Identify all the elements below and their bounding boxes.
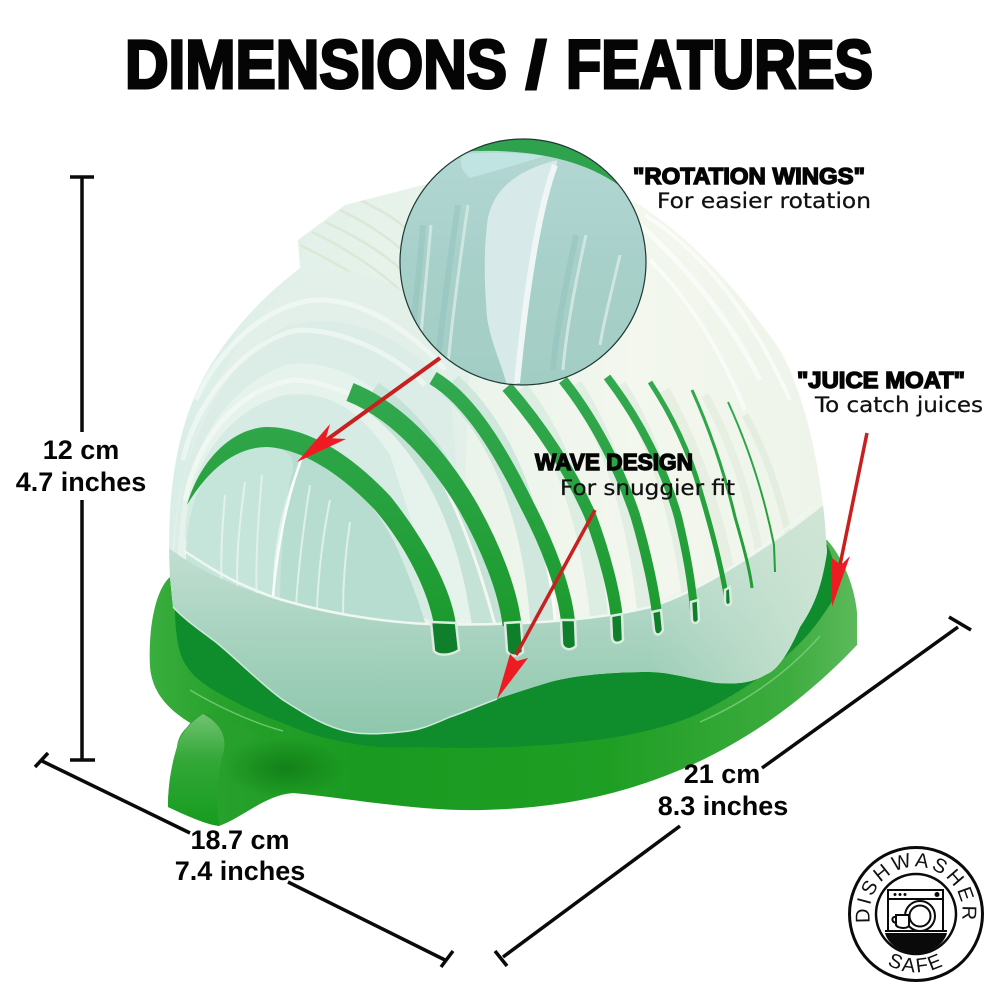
- callout: juice moat: [797, 367, 983, 417]
- callout: wave design: For snuggier fit: [560, 476, 735, 500]
- pale bands between slots: [370, 385, 795, 625]
- green tray with handle: [150, 540, 857, 826]
- badge lettering: DISHWASHER: [856, 852, 976, 922]
- title: /: [526, 28, 546, 102]
- bowl bottom edge: [173, 607, 497, 734]
- title: DIMENSIONS: [125, 26, 507, 103]
- dimension: height: [10, 177, 150, 760]
- panel ribs: [221, 465, 350, 613]
- badge dishwasher icon: [885, 890, 947, 931]
- lower band below rim: [160, 500, 840, 740]
- dimension: height: 12 cm: [43, 435, 119, 465]
- bowl dome: [160, 170, 840, 740]
- dimension: depth: 7.4 inches: [175, 856, 305, 886]
- arrow: wave design: [497, 510, 595, 699]
- left concentric shells: [170, 270, 470, 620]
- title: FEATURES: [566, 26, 873, 103]
- callout: rotation wings: For easier rotation: [657, 189, 871, 213]
- lens outline: [400, 139, 646, 385]
- lens green arc: [470, 140, 618, 185]
- dimension: depth: [35, 753, 453, 967]
- slot ends: [431, 587, 731, 656]
- handle front face: [168, 714, 224, 826]
- badge: dishwasher safe: [848, 846, 984, 982]
- callout: rotation wings: [633, 163, 871, 213]
- dimension: width: 21 cm: [684, 759, 760, 789]
- lens wing: [485, 160, 557, 385]
- handle top surface: [177, 713, 258, 750]
- dimension: width: 8.3 inches: [658, 791, 788, 821]
- lens ribs: [420, 205, 620, 370]
- callout: rotation wings: "ROTATION WINGS": [633, 163, 865, 189]
- callout: juice moat: To catch juices: [814, 393, 983, 417]
- juice moat: [175, 545, 835, 748]
- tray rim highlight: [190, 636, 820, 731]
- badge: dishwasher safe: SAFE: [888, 954, 942, 972]
- magnifier lens: rotation wing detail: [400, 130, 650, 385]
- callout: juice moat: "JUICE MOAT": [797, 367, 965, 393]
- green slots: [350, 377, 775, 625]
- lens flange: [461, 153, 545, 178]
- dimension: depth: 18.7 cm: [190, 825, 290, 855]
- dimension: width: [495, 617, 971, 966]
- arrow: juice moat: [832, 433, 867, 607]
- salad cutter bowl product: [150, 170, 857, 826]
- title: [125, 26, 873, 103]
- dimension: height: 4.7 inches: [16, 467, 146, 497]
- front panel under first slot: [186, 448, 425, 623]
- first slot, tapered: [187, 427, 456, 625]
- callout: wave design: [535, 449, 735, 500]
- top ribs: [300, 200, 790, 410]
- arrow: rotation wings: [297, 358, 440, 462]
- callout: wave design: WAVE DESIGN: [535, 449, 693, 475]
- handle shadow: [223, 738, 347, 798]
